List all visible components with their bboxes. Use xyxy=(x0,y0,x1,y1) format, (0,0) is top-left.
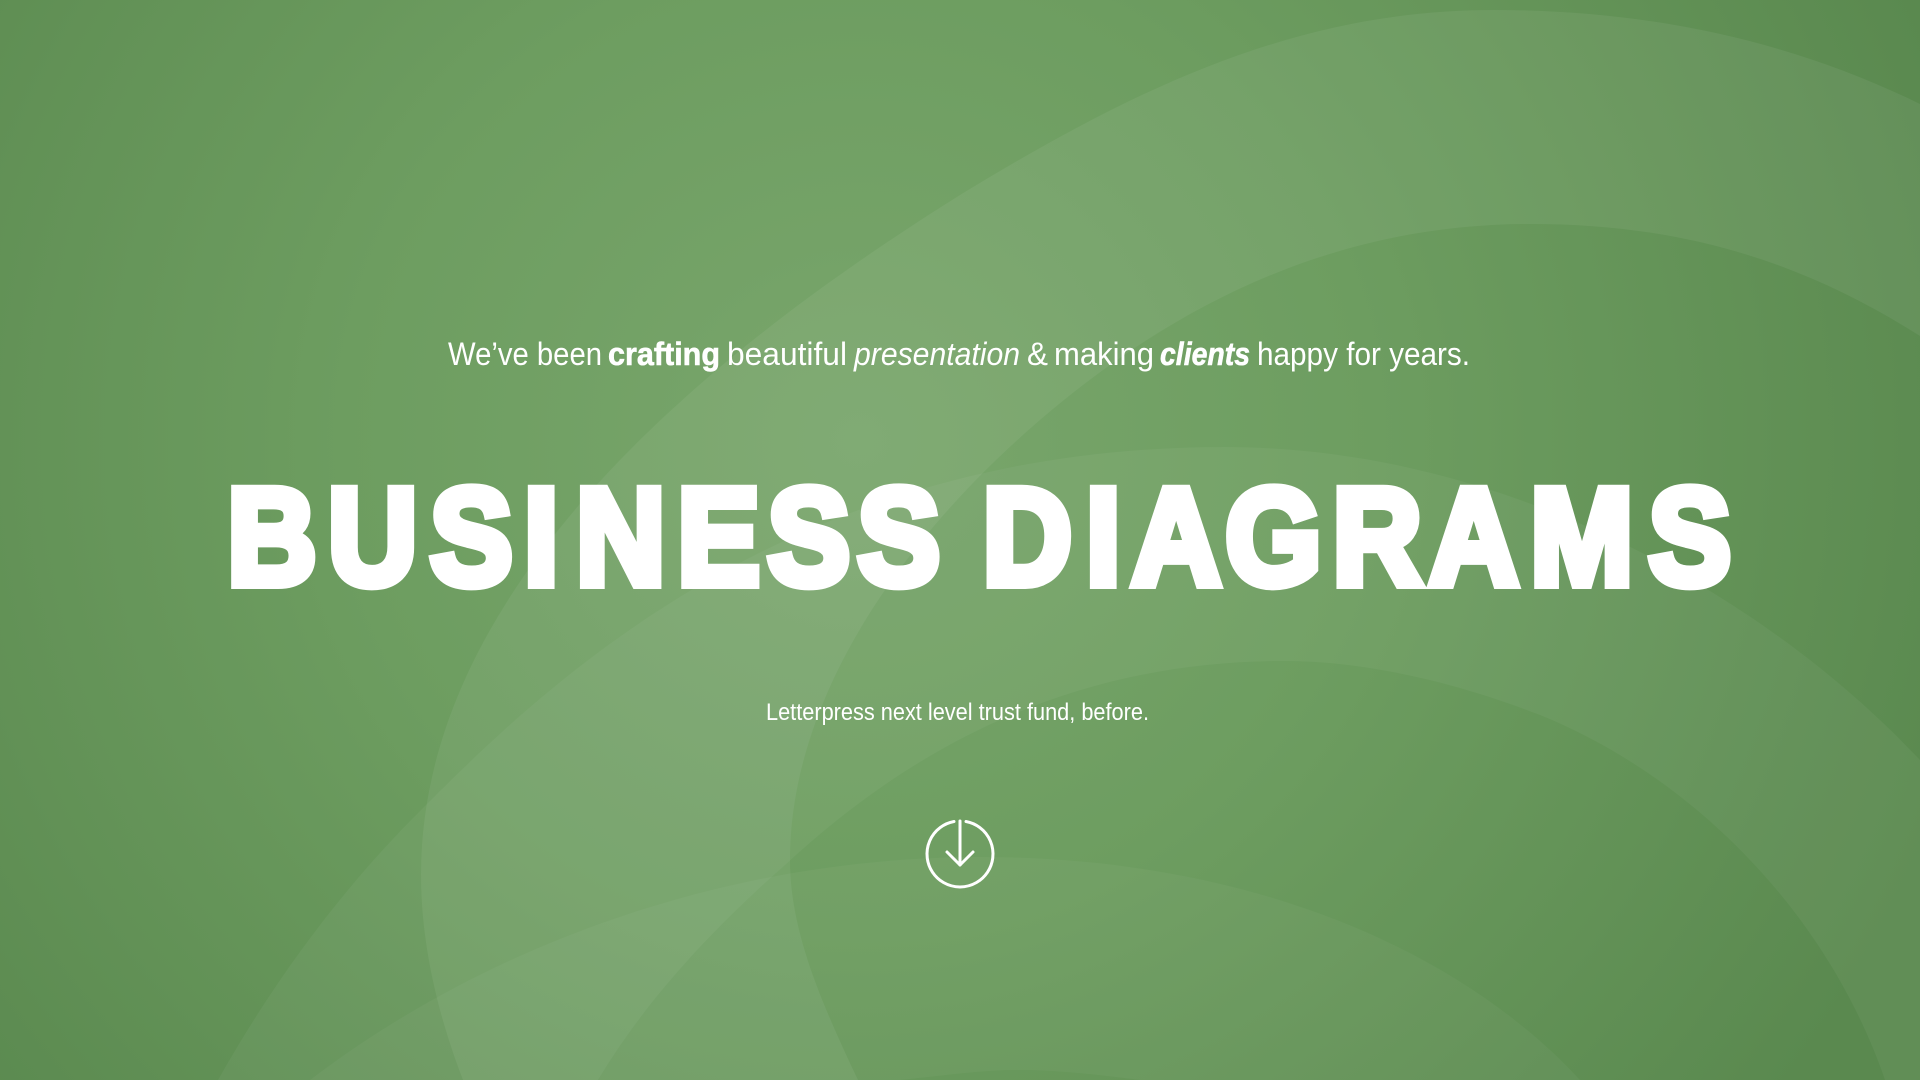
tagline: presentation xyxy=(853,336,1020,372)
title: BUSINESS DIAGRAMS xyxy=(227,460,1731,613)
tagline: & xyxy=(1027,336,1048,372)
tagline: crafting xyxy=(608,336,720,372)
icon: down arrow in circle xyxy=(927,821,993,887)
tagline: making xyxy=(1054,336,1154,372)
tagline: happy for years. xyxy=(1257,336,1470,372)
tagline: beautiful xyxy=(727,336,847,372)
tagline: clients xyxy=(1160,336,1250,372)
subtitle: Letterpress next level trust fund, before. xyxy=(766,699,1149,726)
tagline: We’ve been xyxy=(448,336,602,372)
tagline xyxy=(448,336,1470,372)
